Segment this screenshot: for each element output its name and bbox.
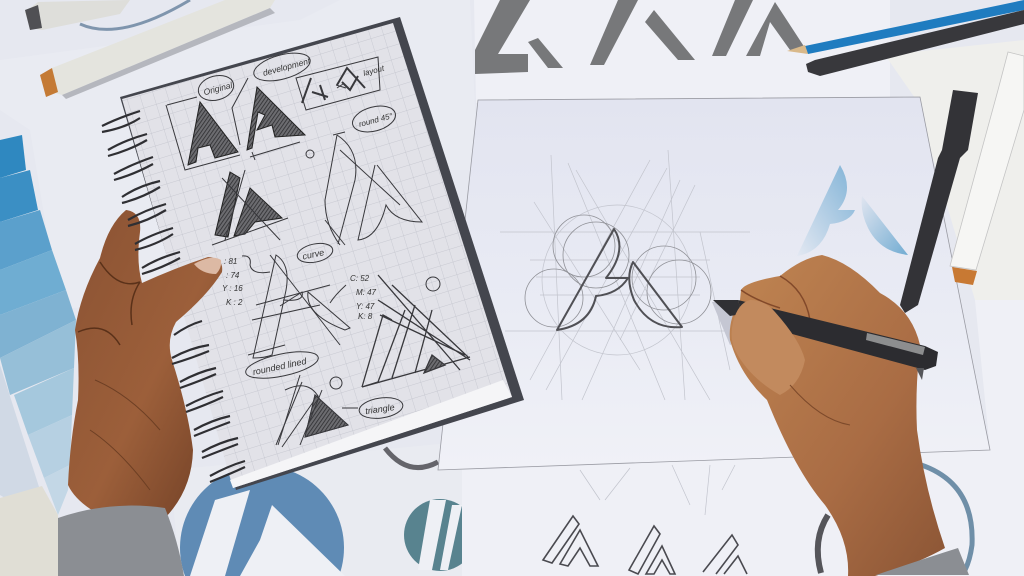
- sketch: hatched logo 2: [215, 172, 240, 237]
- printed logo mark 5: [712, 0, 753, 56]
- sketch label: triangle: triangle: [365, 402, 395, 416]
- sketch label: curve: [296, 240, 334, 266]
- white marker right: [950, 52, 1024, 285]
- markers top left: [25, 0, 275, 99]
- left hand creases: [78, 262, 140, 345]
- sketch label: development: [251, 48, 313, 86]
- paper: bottom right sheet: [462, 300, 1024, 576]
- paper: top sheet with logo marks: [474, 0, 890, 103]
- pen shadow: [712, 300, 760, 345]
- black marker right: [900, 90, 978, 313]
- printed logo mark 4: [645, 10, 695, 60]
- left sleeve: [58, 506, 184, 576]
- sketch: c m y k left: : 81: [224, 257, 237, 266]
- sketch: c m y k left: : 74: [226, 271, 240, 280]
- sketch: layout box: layout: [362, 64, 386, 78]
- right hand knuckle fold: [741, 276, 810, 320]
- printed logo mark 2: [528, 38, 563, 68]
- paper: right side sheet: [885, 40, 1024, 300]
- sketch: layout box: [296, 57, 386, 110]
- sketch: hatched triangle A: [247, 87, 305, 150]
- grey circle logo peek: [385, 448, 438, 468]
- sketch label: rounded lined: rounded lined: [252, 356, 308, 377]
- sketch: logo with curve: [325, 135, 422, 245]
- sketch label: development: development: [262, 56, 312, 78]
- color swatch strip: [0, 135, 76, 576]
- sketch: c m y k left: [222, 257, 243, 307]
- right hand crease: [790, 385, 850, 425]
- paper: main drawing sheet: [438, 97, 990, 470]
- printed logo mark 3: [590, 0, 638, 65]
- construction guide lines: [500, 150, 750, 400]
- pen held in hand: [713, 300, 938, 380]
- sketch: c m y k right: K: 8: [358, 312, 373, 321]
- right hand back: [730, 255, 945, 576]
- marker 1: [25, 0, 130, 30]
- pens top right: [787, 0, 1024, 76]
- sketch label: triangle: [358, 395, 404, 421]
- left hand holding notebook: [68, 210, 222, 519]
- sketch label: curve: curve: [301, 247, 325, 262]
- small logo marks: [543, 516, 747, 574]
- right index finger: [732, 300, 805, 395]
- sketch label: rounded lined: [244, 347, 320, 383]
- sketch: hatched A: [188, 102, 238, 165]
- sketch: logo with rounded lines: [253, 255, 350, 358]
- left thumb nail: [194, 258, 221, 274]
- notebook page: [122, 23, 512, 488]
- right sleeve: [876, 548, 969, 575]
- sketch: c m y k left: Y : 16: [222, 284, 243, 293]
- sketch: c m y k left: K : 2: [226, 298, 243, 307]
- sketch: circled 2: [426, 277, 440, 291]
- sketch label: Original: Original: [202, 80, 234, 97]
- ring logo: [915, 463, 972, 570]
- printed logo mark 1: [475, 0, 530, 74]
- faint guide lines: [580, 465, 735, 515]
- notebook spiral binding: [102, 111, 245, 482]
- paper: bottom left logo sheet: [170, 440, 480, 576]
- sketch: c m y k right: M: 47: [356, 288, 377, 297]
- sketches: [166, 48, 470, 447]
- blue pencil: [805, 0, 1024, 54]
- sketch label: Original: [196, 72, 236, 104]
- sketch: c m y k right: [350, 274, 377, 321]
- sketch: circled 3: [330, 377, 342, 389]
- pen-drawn logo outline: [557, 229, 682, 330]
- left hand palm and thumb: [68, 210, 222, 519]
- paper: upper left sheet: [0, 0, 478, 310]
- notebook cover: [120, 17, 524, 490]
- printed blue logo: [797, 165, 908, 256]
- sketch: circled 1: [306, 150, 314, 158]
- sketch: c m y k right: C: 52: [350, 274, 370, 283]
- marker 2: [46, 0, 275, 95]
- sketch: small triangle logo: [276, 382, 348, 447]
- teal circle logo: [404, 499, 476, 571]
- printed logo mark 6: [746, 2, 805, 56]
- sketch: original box: [166, 78, 248, 170]
- sketch label: round 45: [350, 102, 398, 136]
- blue circle logo: [180, 466, 344, 576]
- construction circles: [525, 215, 711, 327]
- sketch: c m y k right: Y: 47: [356, 302, 375, 311]
- notebook: [120, 17, 524, 490]
- sketch: logo with stripes: [362, 275, 470, 387]
- black pen: [806, 10, 1024, 76]
- sketch label: round 45: round 45°: [358, 111, 394, 129]
